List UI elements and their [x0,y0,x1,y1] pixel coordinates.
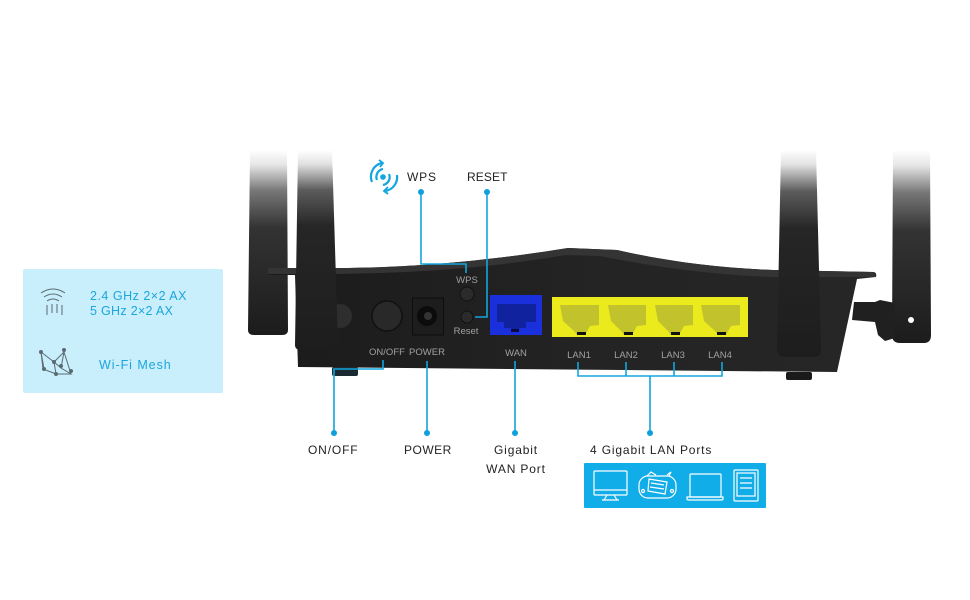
reset button [461,311,473,323]
foot: left [332,367,358,376]
foot: right [786,372,812,380]
silkscreen labels: WPS [456,275,478,286]
WAN port [490,295,542,335]
callout line: WAN [512,361,518,436]
panel: wireless specs [23,269,223,393]
power socket [412,298,444,335]
label: 4 Gigabit LAN Ports: 4 Gigabit LAN Ports [590,443,712,457]
silkscreen labels: ON/OFF [369,347,405,358]
label: RESET: RESET [467,170,508,184]
router antenna: front right [777,150,821,357]
LAN ports [552,297,748,337]
panel: LAN devices [584,463,766,508]
WPS button [460,287,474,301]
silkscreen labels: Reset [454,326,479,337]
router antenna: rear right [892,150,931,343]
label: Gigabit WAN Port: Gigabit [494,443,538,457]
text: bands: 2.4 GHz 2×2 AX [90,289,187,303]
router antenna: front left [295,150,338,350]
silkscreen labels: LAN1 [567,350,591,361]
silkscreen labels: LAN4 [708,350,732,361]
label: ON/OFF: ON/OFF [308,443,358,457]
callout line: ON/OFF [331,360,383,436]
callout line: RESET [475,189,490,317]
router body [268,248,914,380]
icon: game console [639,472,676,498]
label: POWER: POWER [404,443,452,457]
callout line: POWER [424,361,430,436]
silkscreen labels: WAN [505,348,527,359]
on/off button [372,301,402,331]
callout line: LAN [578,362,722,436]
antenna hinge: right [852,300,895,341]
panel: wireless specs: 5 GHz 2×2 AX [90,304,174,318]
icon: mesh [40,348,72,376]
router antenna: rear left [248,150,288,335]
callout line: WPS [418,189,466,273]
icon: wifi signal [41,289,65,315]
antenna hinge: left [328,304,352,328]
label: Gigabit WAN Port: WAN Port [486,462,546,476]
silkscreen labels: POWER [409,347,445,358]
icon: WPS [371,160,397,194]
silkscreen labels [369,275,732,361]
label: WPS: WPS [407,170,437,184]
icon: tablet [734,470,758,501]
silkscreen labels: LAN2 [614,350,638,361]
icon: desktop [594,471,627,500]
silkscreen labels: LAN3 [661,350,685,361]
text: mesh: Wi-Fi Mesh [99,358,172,372]
icon: laptop [687,474,723,500]
